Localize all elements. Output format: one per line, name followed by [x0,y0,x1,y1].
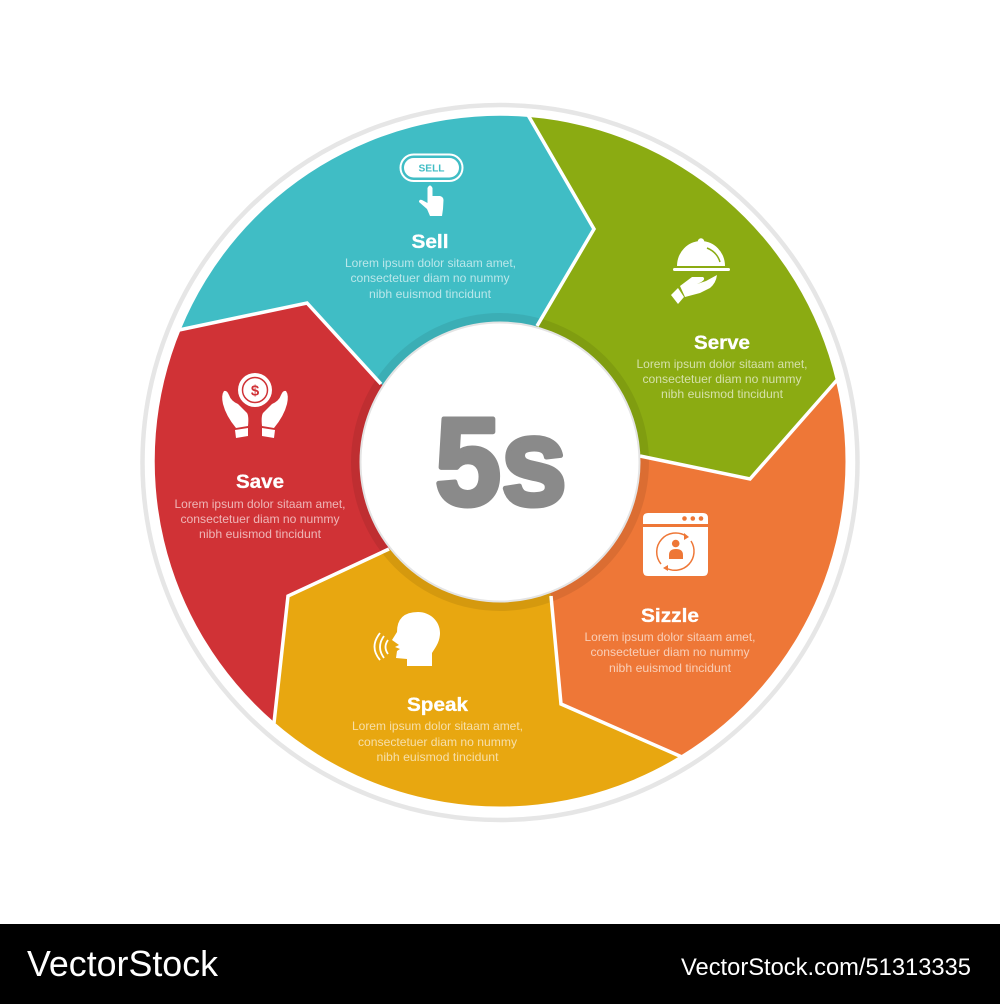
text block: Speak description: nibh euismod tincidunt [376,750,499,764]
panel: Save [155,303,500,722]
text block: Save description: Lorem ipsum dolor sitaam amet, [174,497,346,511]
icon: hands holding a coin: $ [251,382,260,400]
footer logo text: VectorStock [27,943,219,984]
panel: Serve [500,117,836,479]
centre circle [360,322,640,602]
icon: speaking head [374,612,440,666]
icon: sell button and pointing hand [400,154,462,216]
text block: Save description: nibh euismod tincidunt [199,527,322,541]
text block: Sell description: nibh euismod tincidunt [369,287,492,301]
text block: Speak description [352,719,523,764]
text block: Speak description: consectetuer diam no nummy [358,735,517,749]
text block: Save description: consectetuer diam no nummy [180,512,340,526]
footer banner [0,924,1000,1004]
text block: Serve description: consectetuer diam no nummy [642,372,802,386]
icon: hands holding a coin [222,373,288,438]
text block: Serve description: Lorem ipsum dolor sitaam amet, [636,357,808,371]
text block: Sizzle description [584,630,756,675]
text block: Speak description: Lorem ipsum dolor sitaam amet, [352,719,523,733]
icon: cloche on a hand [671,238,730,304]
outer grey ring [142,105,858,820]
text block: Save description [174,497,346,541]
icon: sell button and pointing hand: SELL [418,162,445,174]
text block: Sell description: Lorem ipsum dolor sitaam amet, [345,256,516,270]
inner shadow ring [351,313,649,611]
footer image id: VectorStock.com/51313335 [681,954,971,981]
heading: Speak: Speak [407,695,468,716]
panel: Sell [181,116,594,462]
icon: browser window with user refresh [643,513,708,576]
panel: Speak [274,462,680,807]
text block: Sell description: consectetuer diam no nummy [350,271,510,285]
text block: Sizzle description: nibh euismod tincidunt [609,661,732,675]
heading: Save: Save [236,472,284,493]
text block: Sizzle description: consectetuer diam no nummy [590,645,750,659]
text block: Sell description [345,256,516,301]
heading: Sizzle: Sizzle [641,606,699,627]
centre label: 5s: 5s [435,394,567,532]
text block: Serve description [636,357,808,401]
text block: Serve description: nibh euismod tincidunt [661,387,784,401]
heading: Serve: Serve [694,333,750,354]
text block: Sizzle description: Lorem ipsum dolor sitaam amet, [584,630,756,644]
panel: Sizzle [500,381,845,756]
heading: Sell: Sell [412,232,448,253]
